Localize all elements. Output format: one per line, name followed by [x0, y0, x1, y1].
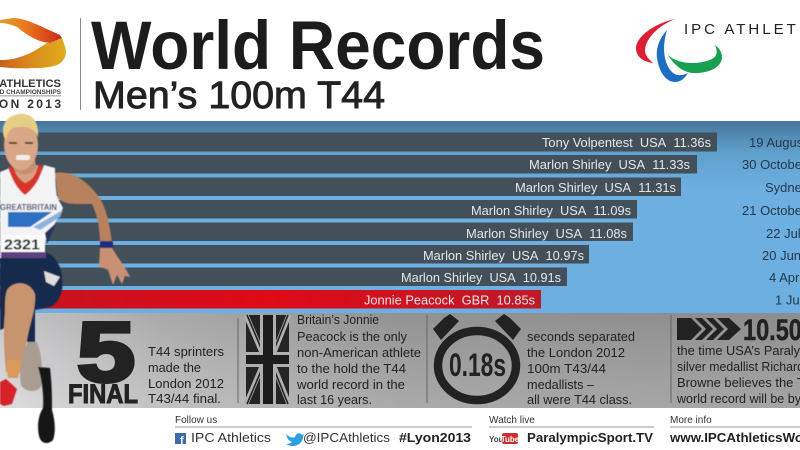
- fact: 10.50s: [676, 314, 800, 406]
- fact: only non-American: last 16 years.: [297, 392, 372, 407]
- fact: 0.18 seconds: [527, 329, 635, 407]
- footer: more info: More info: [670, 415, 712, 426]
- bar: Marlon Shirley 10.91s: Marlon Shirley USA 10.91s: [401, 270, 561, 285]
- dates column: [742, 135, 800, 308]
- shorts: [0, 252, 62, 342]
- bar: Marlon Shirley 11.31s: [0, 178, 681, 196]
- fact: only non-American: Britain’s Jonnie: [297, 312, 379, 327]
- fact: 5 in final: T44 sprinters: [148, 344, 224, 359]
- vest: [0, 165, 63, 258]
- footer: watch live: Watch live: [489, 415, 535, 426]
- rear stump and blade: [20, 342, 42, 391]
- subtitle: Men’s 100m T44: [93, 75, 385, 117]
- footer: follow us: #Lyon2013: [399, 430, 471, 445]
- fact: only non-American: Peacock is the only: [297, 329, 407, 344]
- athlete: Jonnie Peacock: GREATBRITAIN: [0, 203, 57, 212]
- bar: Marlon Shirley 11.33s: [0, 155, 697, 174]
- fact: 5 in final: London 2012: [148, 376, 224, 391]
- icon: chevrons: [677, 318, 741, 340]
- footer: follow us: @IPCAthletics: [303, 430, 391, 445]
- bar: Jonnie Peacock: [0, 290, 541, 308]
- bar: Marlon Shirley 10.97s: Marlon Shirley USA 10.97s: [423, 248, 584, 263]
- fact: only non-American: [296, 312, 421, 407]
- icon: twitter: [286, 433, 304, 446]
- bar: Jonnie Peacock: Jonnie Peacock GBR 10.85s: [364, 292, 535, 308]
- fact: 5 in final: T43/44 final.: [148, 391, 221, 406]
- fact: only non-American: to the hold the T44: [297, 361, 406, 376]
- footer: watch live: [489, 415, 654, 445]
- bar: Marlon Shirley 11.33s: Marlon Shirley USA 11.33s: [529, 157, 690, 172]
- footer: follow us: IPC Athletics: [191, 430, 272, 445]
- chart background: [0, 121, 800, 313]
- fact: only non-American: non-American athlete: [297, 345, 421, 360]
- bar chart: world record progression: [0, 132, 717, 308]
- IPC Athletics logo: [636, 19, 800, 82]
- footer: watch live: Tube: [501, 435, 520, 444]
- fact: 5 in final: [68, 305, 224, 409]
- bar: Marlon Shirley 11.08s: Marlon Shirley USA 11.08s: [466, 226, 627, 241]
- icon: facebook: [175, 433, 186, 444]
- footer: more info: [669, 415, 800, 445]
- shoe: [0, 379, 17, 406]
- fact: 0.18 seconds: seconds separated: [527, 329, 635, 344]
- bar: Marlon Shirley 11.08s: [0, 222, 633, 241]
- athlete: Jonnie Peacock: 2321: [4, 236, 40, 254]
- bar: Marlon Shirley 11.09s: [0, 200, 637, 218]
- bar: Marlon Shirley 11.09s: Marlon Shirley USA 11.09s: [471, 203, 631, 218]
- bar: Marlon Shirley 10.97s: [0, 245, 589, 264]
- header logo: Lyon 2013 championships: [0, 18, 66, 111]
- bar: Tony Volpentest: Tony Volpentest USA 11.36s: [542, 135, 711, 150]
- fact: only non-American: world record in the: [296, 377, 405, 392]
- neck and head: [14, 150, 36, 174]
- icon: union flag: [246, 315, 289, 404]
- footer: follow us: f: [180, 435, 184, 447]
- fact: 0.18 seconds: the London 2012: [527, 345, 625, 360]
- bar: Marlon Shirley 11.31s: Marlon Shirley USA 11.31s: [515, 180, 676, 195]
- footer: follow us: [175, 415, 472, 447]
- fact: 0.18 seconds: all were T44 class.: [527, 392, 632, 407]
- fact: 5 in final: FINAL: [68, 379, 138, 409]
- fact: 5 in final: 5: [77, 305, 135, 399]
- grey facts panel: [0, 313, 800, 408]
- arm: [55, 173, 112, 244]
- icon: youtube: You: [489, 435, 504, 444]
- front leg: [4, 283, 35, 372]
- title: World Records: [91, 7, 545, 84]
- fact: 5 in final: made the: [148, 360, 201, 375]
- icon: stopwatch 0.18s: [433, 314, 521, 400]
- athlete: Jonnie Peacock: [0, 114, 130, 443]
- footer: watch live: ParalympicSport.TV: [527, 430, 653, 445]
- fact: 0.18 seconds: medallists –: [527, 377, 595, 392]
- icon: stopwatch 0.18s: 0.18s: [449, 347, 506, 383]
- footer: follow us: Follow us: [175, 415, 217, 426]
- bar: Tony Volpentest: [0, 132, 717, 152]
- bar: Marlon Shirley 10.91s: [0, 268, 567, 286]
- fact: 0.18 seconds: 100m T43/44: [527, 361, 606, 376]
